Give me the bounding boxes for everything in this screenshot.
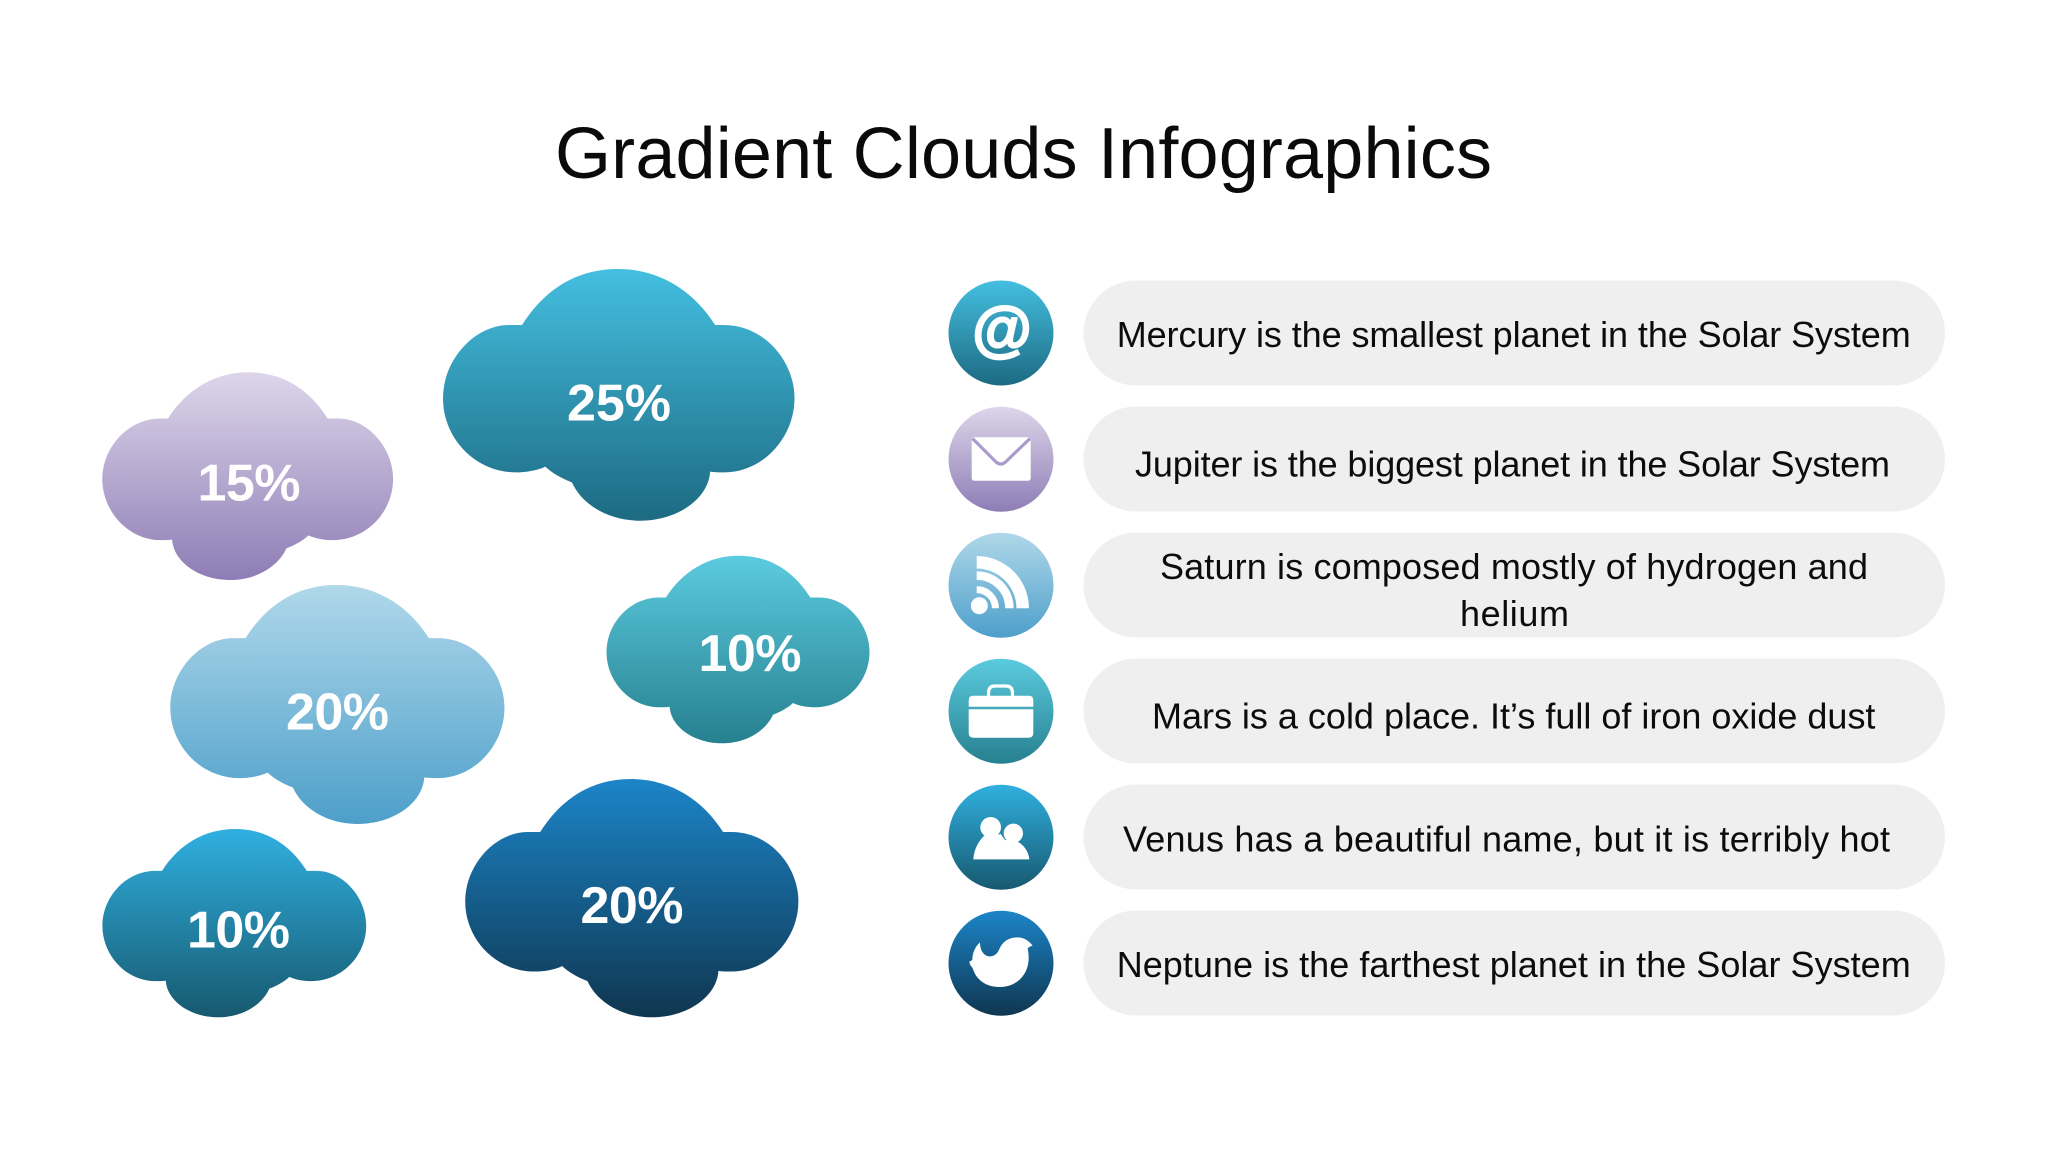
cloud: 20% dark blue	[465, 779, 798, 1017]
cloud: 20% light blue	[170, 585, 505, 824]
text pill: Saturn: helium	[1460, 593, 1569, 634]
cloud: 10% blue	[102, 829, 366, 1017]
text pill: Venus	[1084, 784, 1945, 890]
cloud: 15%: 15%	[198, 455, 300, 513]
cloud: 15%	[102, 372, 393, 580]
text pill: Jupiter: Jupiter is the biggest planet in the Solar System	[1135, 444, 1890, 484]
icon: briefcase	[948, 659, 1054, 764]
row: Mars	[948, 658, 1945, 764]
cloud: 25%	[443, 269, 794, 521]
text pill: Mercury	[1084, 280, 1945, 386]
cloud: 25%: 25%	[567, 375, 671, 433]
icon: at sign	[948, 280, 1054, 386]
icon: bird	[948, 911, 1054, 1016]
row: Mercury	[948, 280, 1945, 386]
cloud: 10% teal	[606, 556, 870, 743]
text pill: Neptune: Neptune is the farthest planet in the Solar System	[1117, 944, 1911, 985]
cloud: 10% teal: 10%	[698, 625, 802, 683]
panel: list of planets	[948, 280, 1945, 1016]
row: Neptune	[948, 910, 1945, 1016]
row: Saturn	[948, 532, 1945, 638]
text pill: Mercury: Mercury is the smallest planet in the Solar System	[1117, 314, 1911, 355]
row: Venus	[948, 784, 1945, 890]
text pill: Saturn	[1084, 532, 1945, 638]
row: Jupiter	[948, 406, 1945, 512]
icon: rss feed	[948, 533, 1054, 638]
icon: envelope	[948, 407, 1054, 512]
text pill: Neptune	[1084, 910, 1945, 1016]
title: Gradient Clouds Infographics	[555, 114, 1492, 194]
panel: clouds	[102, 269, 870, 1017]
text pill: Jupiter	[1084, 406, 1945, 512]
cloud: 10% blue: 10%	[187, 902, 290, 960]
text pill: Mars: Mars is a cold place. It’s full of iron oxide dust	[1152, 696, 1875, 736]
cloud: 20% light blue: 20%	[286, 684, 389, 742]
icon: at sign: @	[971, 296, 1031, 364]
text pill: Mars	[1084, 658, 1945, 764]
icon: people	[948, 785, 1054, 890]
cloud: 20% dark blue: 20%	[580, 877, 684, 935]
text pill: Saturn: Saturn is composed mostly of hydrogen and	[1160, 546, 1868, 587]
text pill: Venus: Venus has a beautiful name, but it is terribly hot	[1123, 818, 1890, 860]
